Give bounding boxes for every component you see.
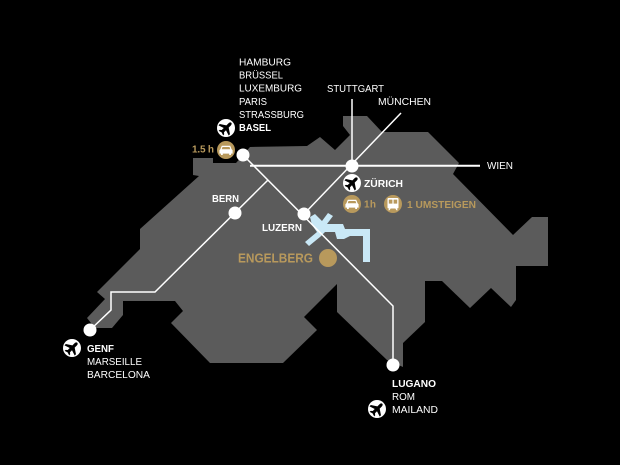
label: München: MÜNCHEN: [378, 96, 431, 108]
route: Luzern to München: [304, 113, 401, 214]
dot: Zürich: [346, 160, 358, 172]
map: Switzerland silhouette: [87, 116, 548, 367]
icon: plane Zürich: [342, 173, 362, 193]
labels: Basel destinations: STRASSBURG: [239, 110, 304, 121]
label: 1 h: 1 h: [364, 200, 376, 211]
route: Basel to Lugano: [243, 155, 393, 365]
station dots: [84, 148, 400, 372]
labels: Lugano destinations: LUGANO: [392, 379, 436, 390]
labels: Lugano destinations: ROM: [392, 392, 415, 403]
icon: plane Genf: [62, 338, 82, 358]
labels: Lugano destinations: MAILAND: [392, 405, 438, 416]
label: Bern: BERN: [212, 194, 239, 205]
label: Zürich: ZÜRICH: [364, 177, 403, 190]
label: Engelberg: ENGELBERG: [238, 250, 313, 266]
icon: car Basel: [217, 141, 235, 159]
labels: Basel destinations: PARIS: [239, 97, 267, 108]
lake: Vierwaldstättersee: [305, 213, 370, 262]
label: Wien: WIEN: [487, 161, 513, 172]
icon: car Zürich: [343, 195, 361, 213]
route: Basel to Wien: [250, 165, 480, 167]
marker: Engelberg: [319, 249, 337, 267]
labels: Genf destinations: BARCELONA: [87, 370, 150, 381]
icon: plane Basel: [216, 118, 236, 138]
route lines: [90, 99, 480, 365]
labels: Genf destinations: MARSEILLE: [87, 357, 142, 368]
dot: Basel: [236, 148, 250, 162]
labels: Genf destinations: GENF: [87, 344, 114, 355]
icon: train Zürich: [384, 195, 402, 213]
labels: Basel destinations: BRÜSSEL: [239, 70, 283, 82]
dot: Genf: [84, 324, 96, 336]
label: Stuttgart: STUTTGART: [327, 84, 384, 95]
dot: Lugano: [386, 358, 400, 372]
label: 1 Umsteigen: 1 UMSTEIGEN: [407, 200, 476, 211]
labels: Basel destinations: [239, 58, 304, 134]
labels: Basel destinations: HAMBURG: [239, 58, 291, 68]
labels: Basel destinations: LUXEMBURG: [239, 84, 302, 95]
dot: Bern: [228, 206, 242, 220]
icon: plane Lugano: [367, 399, 387, 419]
route: Genf to Basel line via Bern: [90, 180, 268, 330]
labels: Lugano destinations: [392, 379, 438, 416]
labels: Basel destinations: BASEL: [239, 123, 271, 134]
dot: Luzern: [298, 208, 310, 220]
label: 1.5 h: 1.5 h: [192, 145, 214, 156]
route: Zürich to Stuttgart: [351, 99, 353, 166]
label: Luzern: LUZERN: [262, 223, 302, 234]
labels: Genf destinations: [87, 344, 150, 381]
